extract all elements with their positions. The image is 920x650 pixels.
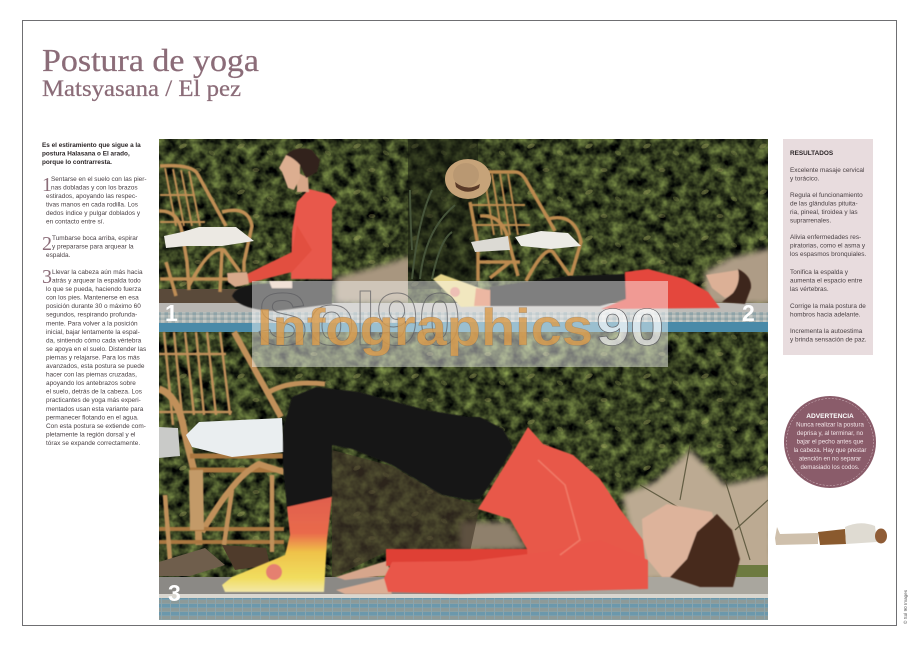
title: Postura de yoga	[42, 42, 259, 78]
pool edge	[159, 577, 470, 594]
callout: advertencia: ADVERTENCIA	[806, 413, 854, 420]
panel: resultados: Alivia enfermedades res-	[790, 234, 861, 241]
intro text: postura Halasana o El arado,	[42, 150, 130, 158]
step 3: piernas y relajarse. Para los más	[46, 354, 140, 362]
watermark	[252, 278, 668, 367]
step 3: posición durante 30 o máximo 60	[46, 303, 141, 310]
title	[42, 42, 259, 102]
watermark: Infographics	[257, 299, 593, 357]
intro text: Es el estiramiento que sigue a la	[42, 142, 141, 149]
cushion	[164, 227, 254, 248]
step 2: 2	[42, 233, 52, 255]
wall behind ivy	[335, 256, 412, 303]
photo 3: fish pose	[159, 332, 772, 620]
panel: resultados: aumenta el espacio entre	[790, 278, 863, 284]
pool edge	[159, 303, 409, 312]
chair	[159, 332, 325, 560]
step 1: estirados, apoyando las respec-	[46, 193, 137, 200]
step 3	[42, 266, 146, 447]
subtitle: Matsyasana / El pez	[42, 76, 241, 102]
cushions	[471, 236, 510, 252]
grass	[736, 565, 768, 577]
panel: resultados: de las glándulas pituita-	[790, 200, 858, 208]
photo number 1: 1	[165, 300, 178, 326]
stones	[159, 289, 239, 303]
step 2: y prepararse para arquear la	[52, 244, 134, 250]
upper sleeve	[386, 549, 540, 566]
panel: resultados: y torácico.	[790, 176, 820, 182]
panel: resultados: suprarrenales.	[790, 218, 831, 224]
step 3: el suelo, detrás de la cabeza. Los	[46, 389, 142, 396]
panel: resultados: y brinda sensación de paz.	[790, 336, 867, 344]
woman in bridge	[222, 387, 740, 594]
sock and foot	[222, 497, 332, 592]
step 3: tórax se expande correctamente.	[46, 440, 140, 447]
photo number 3: 3	[168, 580, 181, 606]
panel: resultados: Corrige la mala postura de	[790, 303, 866, 310]
photo 2: lying pose	[408, 139, 772, 333]
callout: advertencia: Nunca realizar la postura	[796, 422, 864, 428]
panel: resultados: piratorias, como el asma y	[790, 242, 866, 250]
panel: resultados: Incrementa la autoestima	[790, 328, 863, 335]
callout: advertencia: la cabeza. Hay que prestar	[794, 447, 866, 454]
step 3: con los pies. Mantenerse en esa	[46, 295, 139, 302]
step 1: tivas manos en cada rodilla. Los	[46, 202, 138, 208]
step 3: pletamente la región dorsal y el	[46, 431, 135, 438]
watermark: 90	[596, 299, 664, 357]
stones	[159, 548, 225, 576]
panel: resultados: RESULTADOS	[790, 150, 834, 157]
illustration: lying figure	[775, 523, 887, 545]
plant	[410, 190, 455, 279]
legs	[283, 387, 513, 509]
step 3: atrás y arquear la espalda todo	[52, 278, 141, 284]
pool edge	[408, 303, 768, 312]
step 3: practicantes de yoga más experi-	[46, 397, 141, 404]
step 2: Tumbarse boca arriba, espirar	[52, 235, 139, 242]
step 3: permanecer flotando en el agua.	[46, 414, 139, 421]
panel: resultados: las vértebras.	[790, 286, 829, 293]
step 3: hacer con las piernas cruzadas,	[46, 372, 137, 379]
step 1: Sentarse en el suelo con las pier-	[51, 176, 147, 183]
step 3: mentados usan esta variante para	[46, 406, 144, 413]
ground under bridge	[332, 450, 480, 578]
chair	[159, 166, 252, 296]
panel: resultados	[783, 139, 873, 355]
step 2: espalda.	[46, 252, 71, 259]
wall behind ivy	[705, 248, 772, 304]
callout: advertencia: atención en no separar	[799, 456, 861, 462]
step 3: avanzados, esta postura se puede	[46, 363, 145, 370]
step 1: 1	[42, 174, 52, 196]
lower sleeve	[384, 554, 648, 595]
step 1	[42, 174, 147, 226]
step 3: lo que se pueda, haciendo fuerza	[46, 286, 142, 293]
panel: resultados: los espasmos bronquiales.	[790, 251, 866, 258]
step 1: dedos índice y pulgar doblados y	[46, 210, 141, 217]
callout: advertencia: bajar el pecho antes que	[797, 438, 864, 446]
chair	[470, 172, 581, 281]
photo number 2: 2	[742, 300, 755, 326]
panel: resultados: Regula el funcionamiento	[790, 192, 863, 199]
photo 1: seated pose	[159, 139, 412, 333]
wall under torso	[460, 522, 528, 550]
credit: © Sol 90 Images	[902, 589, 908, 624]
text column: instructions	[42, 142, 147, 447]
hair	[670, 514, 740, 587]
wall behind ivy	[622, 450, 772, 580]
step 3: mente. Para volver a la posición	[46, 320, 138, 327]
cushion	[159, 427, 180, 458]
woman seated	[227, 148, 337, 311]
step 1: en contacto entre sí.	[46, 218, 105, 226]
intro text: porque lo contrarresta.	[42, 159, 112, 166]
intro text	[42, 142, 141, 166]
step 2	[42, 233, 139, 259]
callout: advertencia: demasiado los codos.	[801, 464, 860, 471]
woman lying	[433, 269, 751, 309]
step 3: inicial, bajar lentamente la espal-	[46, 329, 140, 336]
step 3: apoyando los antebrazos sobre	[46, 380, 136, 387]
step 3: se apoya en el suelo. Distender las	[46, 346, 146, 353]
watermark: Sol90	[257, 278, 461, 361]
step 3: 3	[42, 266, 52, 288]
step 3: Llevar la cabeza aún más hacia	[52, 269, 143, 276]
hat	[445, 159, 491, 199]
panel: resultados: Excelente masaje cervical	[790, 167, 864, 174]
panel: resultados: ria, pineal, tiroidea y las	[790, 209, 858, 216]
callout: advertencia	[784, 396, 876, 488]
step 1: nas dobladas y con los brazos	[51, 184, 138, 192]
panel: resultados: Tonifica la espalda y	[790, 269, 849, 276]
torso	[478, 426, 646, 559]
hands	[336, 561, 392, 580]
callout: advertencia: deprisa y, al terminar, no	[797, 430, 864, 437]
step 3: segundos, respirando profunda-	[46, 312, 137, 319]
step 3: Con esta postura se extiende com-	[46, 423, 146, 430]
neck and face	[642, 504, 717, 577]
step 3: da, sintiendo cómo cada vértebra	[46, 337, 142, 344]
panel: resultados: hombros hacia adelante.	[790, 312, 861, 318]
